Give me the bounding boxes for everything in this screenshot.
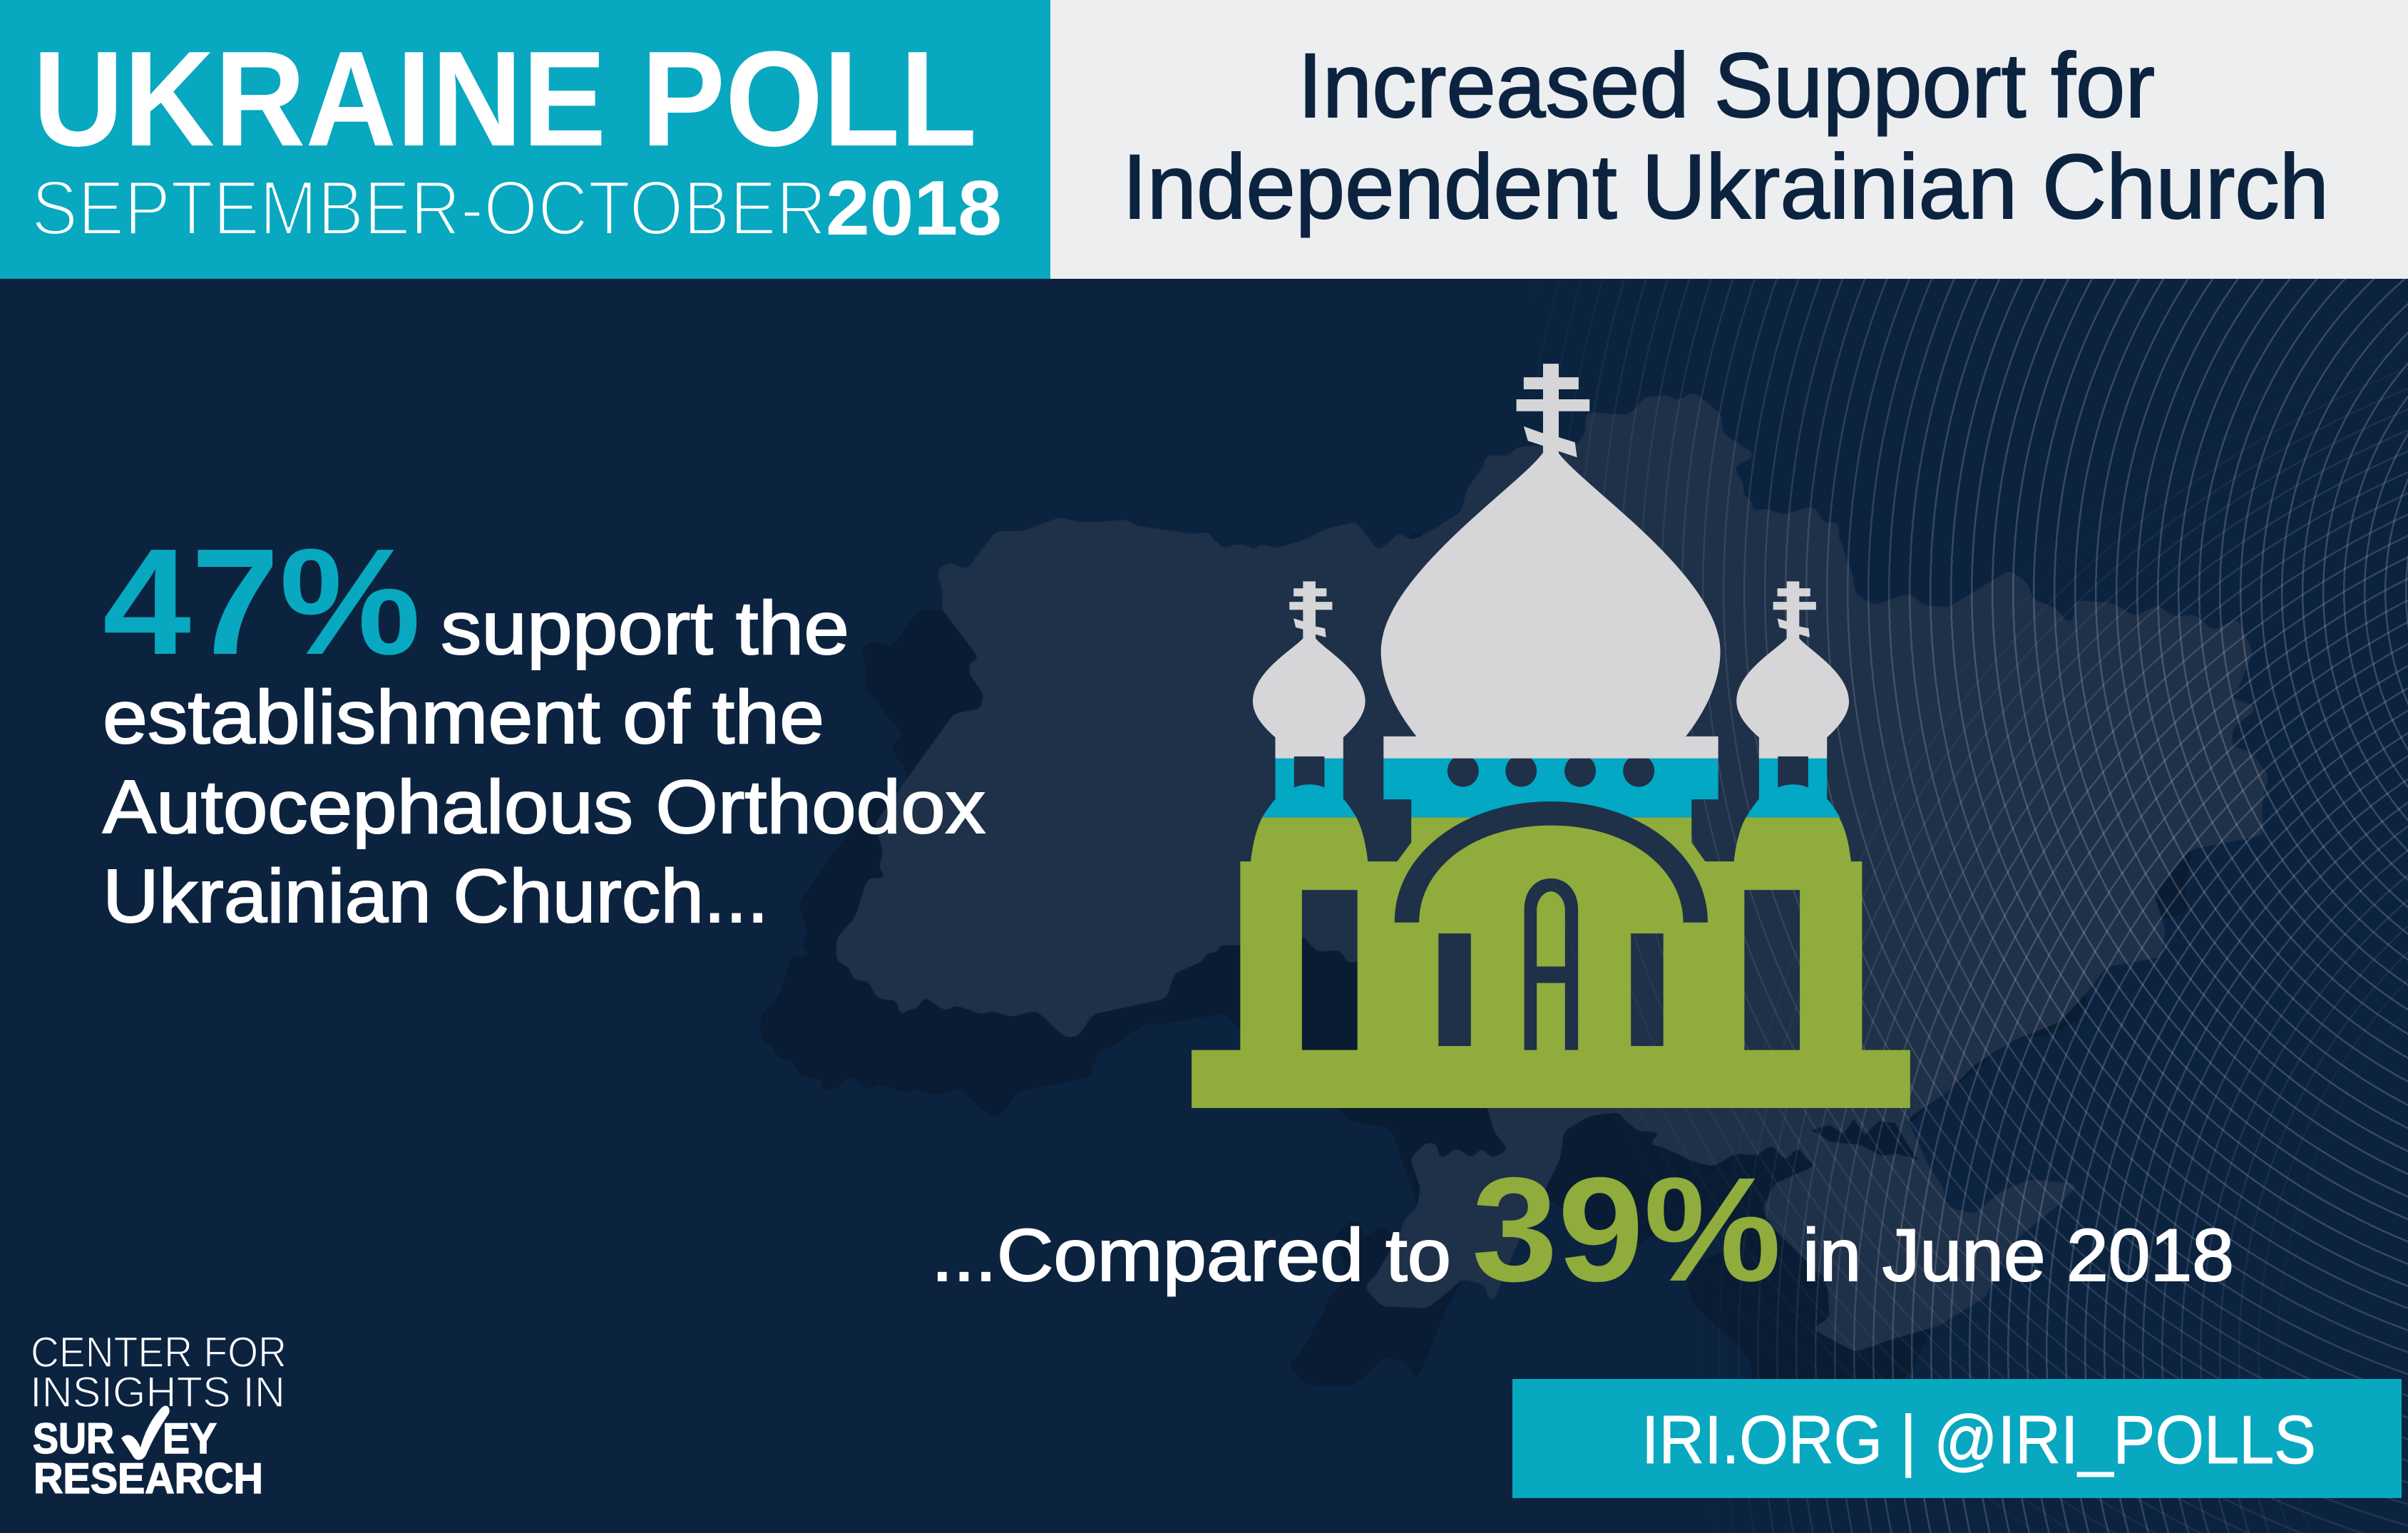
- footer link bar: [1512, 1379, 2402, 1498]
- text block: 47% support statement: [103, 517, 985, 938]
- text block: 47% support statement: support the: [441, 586, 849, 670]
- header panel: topic headline: Increased Support for: [1298, 35, 2155, 137]
- entrance arch: [1395, 801, 1708, 923]
- church body: [1192, 817, 1910, 1108]
- header panel: poll title: [0, 0, 1050, 279]
- footer link bar: IRI.ORG | @IRI_POLLS: [1641, 1402, 2316, 1478]
- text block: 47% support statement: establishment of the: [103, 675, 824, 759]
- text block: 47% support statement: Ukrainian Church...: [103, 854, 769, 938]
- header panel: topic headline: [1050, 0, 2408, 279]
- logo: Center for Insights in Survey Research: RESEARCH: [34, 1455, 263, 1502]
- text block: compared to 39% in June 2018: [931, 1147, 2234, 1313]
- header panel: topic headline: Independent Ukrainian Church: [1122, 136, 2329, 238]
- logo: Center for Insights in Survey Research: CENTER FOR: [31, 1328, 287, 1376]
- left tower: [1253, 581, 1366, 817]
- text block: compared to 39% in June 2018: in June 2018: [1803, 1214, 2234, 1297]
- icon: check mark: [121, 1405, 170, 1460]
- subheading: poll dates: 2018: [826, 165, 1002, 252]
- drum windows: [1448, 755, 1654, 787]
- statistic: 47%: 47%: [103, 517, 421, 686]
- logo: Center for Insights in Survey Research: [30, 1328, 287, 1502]
- heading: Ukraine Poll: UKRAINE POLL: [33, 24, 977, 175]
- statistic: 39%: 39%: [1472, 1147, 1781, 1313]
- central drum band: [1383, 759, 1718, 817]
- logo: Center for Insights in Survey Research: EY: [163, 1415, 217, 1462]
- subheading: poll dates: SEPTEMBER-OCTOBER: [31, 165, 826, 252]
- right tower: [1736, 581, 1849, 817]
- icon: orthodox church: [1192, 364, 1910, 1108]
- main dome: [1381, 453, 1721, 759]
- logo: Center for Insights in Survey Research: INSIGHTS IN: [30, 1368, 285, 1416]
- text block: 47% support statement: Autocephalous Orthodox: [103, 765, 985, 849]
- logo: Center for Insights in Survey Research: SUR: [33, 1415, 114, 1462]
- text block: compared to 39% in June 2018: ...Compared to: [931, 1214, 1451, 1297]
- main cross: [1517, 364, 1589, 457]
